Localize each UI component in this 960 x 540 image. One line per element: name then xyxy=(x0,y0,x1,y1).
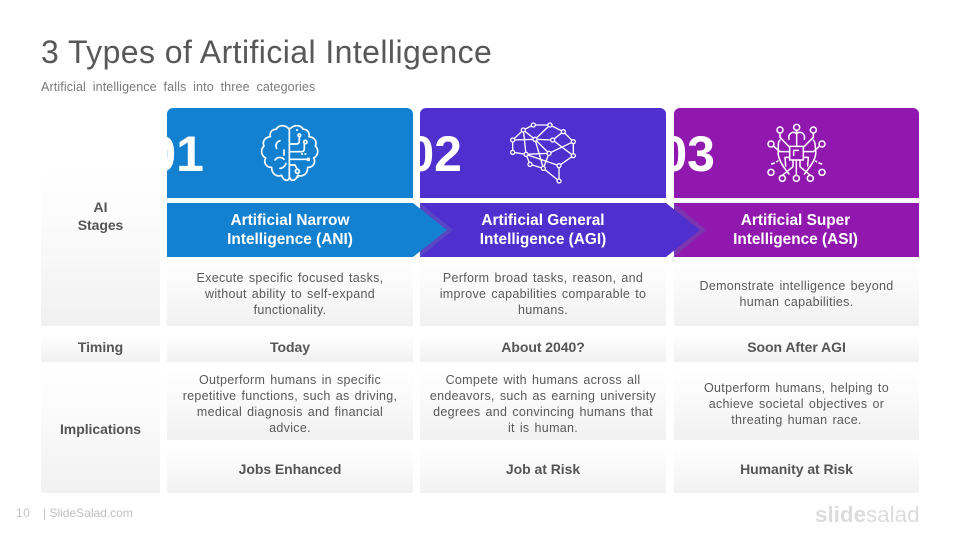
banner text: ASI: Intelligence (ASI) xyxy=(733,231,858,248)
description: AGI xyxy=(420,257,666,326)
description: ASI: Demonstrate intelligence beyond xyxy=(700,279,893,293)
description: ANI: without ability to self-expand xyxy=(205,287,375,301)
banner text: ASI xyxy=(733,212,858,248)
implications: ASI: Outperform humans, helping to xyxy=(704,381,889,395)
implications: AGI: degrees and convincing humans that xyxy=(433,405,653,419)
icon: brain circuit xyxy=(260,124,318,182)
description: ANI: Execute specific focused tasks, xyxy=(197,271,383,285)
icon: neural network brain xyxy=(510,122,576,184)
timing: ANI xyxy=(167,333,413,362)
banner text: ASI: Artificial Super xyxy=(741,212,850,229)
row label: Timing xyxy=(41,333,160,362)
description: AGI: Perform broad tasks, reason, and xyxy=(443,271,643,285)
row label: AI Stages: Stages xyxy=(78,217,123,233)
timing: AGI xyxy=(420,333,666,362)
outcome: AGI: Job at Risk xyxy=(506,461,580,477)
implications: AGI xyxy=(420,368,666,440)
outcome: AGI xyxy=(420,445,666,493)
card: 02 xyxy=(420,108,666,198)
row label: Implications xyxy=(41,368,160,493)
implications: ASI: achieve societal objectives or xyxy=(709,397,884,411)
implications: AGI: it is human. xyxy=(508,421,578,435)
banner text: ANI: Intelligence (ANI) xyxy=(227,231,353,248)
outcome: ASI: Humanity at Risk xyxy=(740,461,853,477)
banner text: AGI: Artificial General xyxy=(481,212,605,229)
logo wordmark: slidesalad xyxy=(815,502,920,527)
implications: ASI: threating human race. xyxy=(731,413,862,427)
banner text: ANI xyxy=(227,212,353,248)
implications: ANI: advice. xyxy=(269,421,311,435)
banner text: ANI: Artificial Narrow xyxy=(231,212,349,229)
outcome: ANI xyxy=(167,445,413,493)
banner shapes xyxy=(167,203,919,257)
timing: ASI xyxy=(674,333,919,362)
row label: Timing: Timing xyxy=(78,339,123,355)
implications: ANI: Outperform humans in specific xyxy=(199,373,381,387)
description: ANI: functionality. xyxy=(254,303,326,317)
description: AGI: improve capabilities comparable to xyxy=(440,287,646,301)
implications: ASI xyxy=(674,368,919,440)
implications: ANI: repetitive functions, such as driving, xyxy=(183,389,397,403)
implications: ANI: medical diagnosis and financial xyxy=(197,405,383,419)
implications: ANI xyxy=(167,368,413,440)
icon: chip brain xyxy=(767,124,826,182)
subtitle: Artificial intelligence falls into three categories xyxy=(41,80,315,94)
banner text: AGI: Intelligence (AGI) xyxy=(480,231,606,248)
description: ASI xyxy=(674,257,919,326)
description: AGI: humans. xyxy=(518,303,568,317)
banner text: AGI xyxy=(480,212,606,248)
row label: AI Stages: AI xyxy=(94,199,107,215)
footer brand: | SlideSalad.com xyxy=(43,506,133,520)
outcome: ASI xyxy=(674,445,919,493)
title: 3 Types of Artificial Intelligence xyxy=(41,34,492,70)
card: 03 xyxy=(674,108,919,198)
card: 01 xyxy=(167,108,413,198)
timing: ASI: Soon After AGI xyxy=(747,339,846,355)
implications: AGI: endeavors, such as earning university xyxy=(430,389,656,403)
description: ASI: human capabilities. xyxy=(739,295,854,309)
page number: 10 xyxy=(16,506,31,520)
implications: AGI: Compete with humans across all xyxy=(446,373,640,387)
row label: AI Stages xyxy=(41,168,160,326)
description: ANI xyxy=(167,257,413,326)
timing: AGI: About 2040? xyxy=(501,339,585,355)
outcome: ANI: Jobs Enhanced xyxy=(239,461,341,477)
row label: Implications: Implications xyxy=(60,421,141,437)
timing: ANI: Today xyxy=(270,339,310,355)
